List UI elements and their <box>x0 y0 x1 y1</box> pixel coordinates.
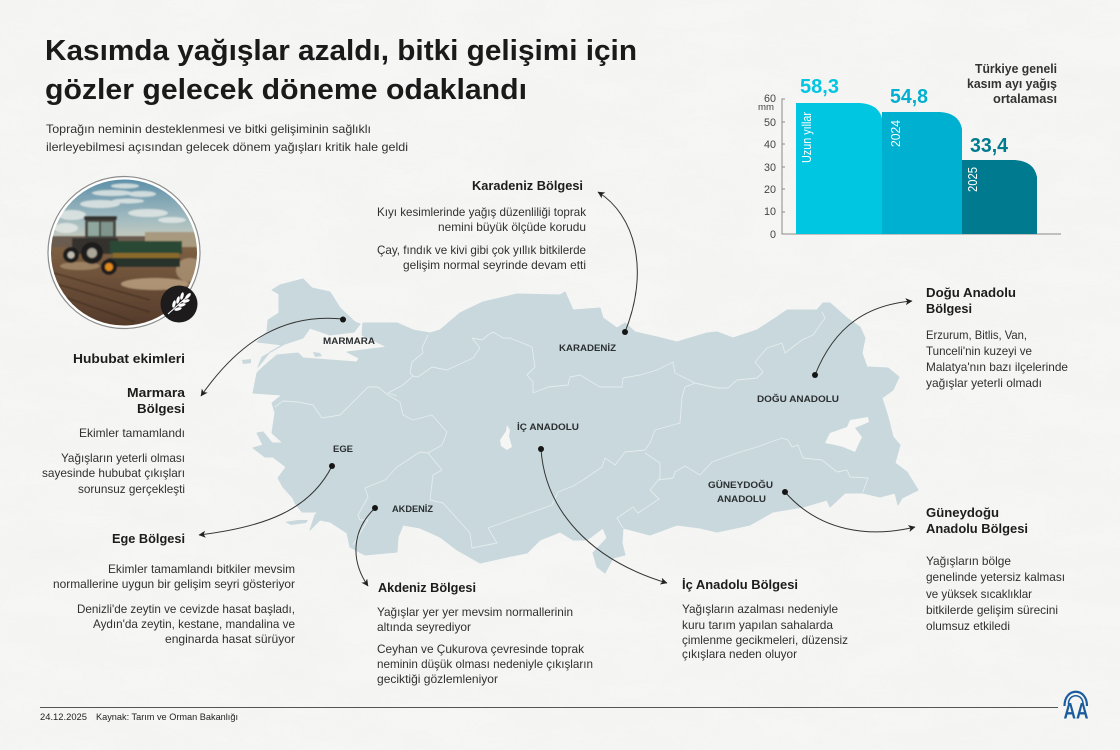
text block: Güneydoğu Anadolu Bölgesi: Anadolu Bölgesi <box>926 521 1028 536</box>
axis labels: 10 <box>764 206 776 218</box>
footer <box>40 708 1058 723</box>
bar: 2025: 2025 <box>965 167 980 192</box>
text block: Doğu Anadolu Bölgesi: Tunceli'nin kuzeyi ve <box>926 344 1032 358</box>
bar: 2025 <box>962 134 1037 234</box>
text block: Ege Bölgesi: Ege Bölgesi <box>112 531 185 546</box>
text block: Ege Bölgesi: Aydın'da zeytin, kestane, mandalina ve <box>93 617 295 631</box>
text block: Doğu Anadolu Bölgesi: Erzurum, Bitlis, Van, <box>926 328 1027 342</box>
text block: Doğu Anadolu Bölgesi <box>926 285 1068 390</box>
map region labels <box>323 336 839 515</box>
map region labels: GÜNEYDOĞU <box>708 479 773 491</box>
region borders <box>275 312 868 548</box>
map region labels: EGE <box>333 444 353 455</box>
axis labels: 0 <box>770 229 776 241</box>
photo: tractor sowing grain <box>48 176 204 329</box>
arrow: Karadeniz <box>598 192 637 335</box>
text block: Ege Bölgesi: normallerine uygun bir gelişim seyri gösteriyor <box>53 577 295 591</box>
axis labels: 30 <box>764 162 776 174</box>
bar: 2024: 2024 <box>888 120 903 147</box>
chart title: Türkiye geneli <box>975 62 1057 76</box>
lakes <box>500 425 512 450</box>
text block: Güneydoğu Anadolu Bölgesi: Güneydoğu <box>926 505 999 520</box>
arrow: Doğu Anadolu <box>812 301 912 378</box>
arrow: Ege <box>199 463 335 535</box>
text block: Akdeniz Bölgesi: geciktiği gözlemleniyor <box>377 672 498 686</box>
axes <box>782 99 1061 234</box>
text block: Marmara Bölgesi: sorunsuz gerçekleşti <box>78 482 185 496</box>
text block: Marmara Bölgesi: Yağışların yeterli olması <box>61 451 185 465</box>
title <box>45 35 637 106</box>
text block: Doğu Anadolu Bölgesi: yağışlar yeterli olmadı <box>926 376 1042 390</box>
axis labels: mm <box>758 102 774 113</box>
text block: Akdeniz Bölgesi <box>377 580 593 686</box>
arrow: Güneydoğu Anadolu <box>782 489 915 532</box>
text block: Akdeniz Bölgesi: Akdeniz Bölgesi <box>378 580 476 595</box>
axis labels: 50 <box>764 117 776 129</box>
arrow: Akdeniz <box>356 505 378 586</box>
text block: İç Anadolu Bölgesi: Yağışların azalması nedeniyle <box>682 602 838 616</box>
map region labels: MARMARA <box>323 336 375 347</box>
logo: AA: AA <box>1064 698 1089 724</box>
text block: Ege Bölgesi: Denizli'de zeytin ve cevizde hasat başladı, <box>77 602 295 616</box>
title: gözler gelecek döneme odaklandı <box>45 74 527 106</box>
chart title: ortalaması <box>993 92 1057 106</box>
text block: Güneydoğu Anadolu Bölgesi <box>926 505 1065 633</box>
islands <box>242 359 251 364</box>
title: Kasımda yağışlar azaldı, bitki gelişimi için <box>45 35 637 67</box>
arrow: İç Anadolu <box>538 446 667 583</box>
tractor <box>84 216 117 220</box>
text block: İç Anadolu Bölgesi: kuru tarım yapılan sahalarda <box>682 618 833 632</box>
bar: Uzun yıllar: 58,3 <box>800 75 839 98</box>
text block: Karadeniz Bölgesi: Karadeniz Bölgesi <box>472 178 583 193</box>
chart title <box>967 62 1057 106</box>
text block: Akdeniz Bölgesi: altında seyrediyor <box>377 620 471 634</box>
text block: İç Anadolu Bölgesi: çimlenme gecikmeleri, düzensiz <box>682 633 848 647</box>
subtitle: Toprağın neminin desteklenmesi ve bitki gelişiminin sağlıklı <box>46 122 371 136</box>
footer: 24.12.2025 <box>40 712 87 723</box>
text block: Karadeniz Bölgesi <box>377 178 587 272</box>
text block: Ege Bölgesi <box>53 531 295 646</box>
text block: İç Anadolu Bölgesi <box>682 577 848 661</box>
text block: Ege Bölgesi: Ekimler tamamlandı bitkiler mevsim <box>108 562 295 576</box>
Thrace <box>257 279 360 367</box>
text block: Marmara Bölgesi: Ekimler tamamlandı <box>79 426 185 440</box>
text block: Güneydoğu Anadolu Bölgesi: Yağışların bölge <box>926 554 1011 568</box>
text block: Doğu Anadolu Bölgesi: Bölgesi <box>926 301 972 316</box>
subtitle: ilerleyebilmesi açısından gelecek dönem yağışları kritik hale geldi <box>46 140 408 154</box>
bar: 2024: 54,8 <box>890 85 928 108</box>
text block: Marmara Bölgesi: sayesinde hububat çıkışları <box>42 466 185 480</box>
text block: Akdeniz Bölgesi: Ceyhan ve Çukurova çevresinde toprak <box>377 642 585 656</box>
logo: AA <box>1064 692 1089 724</box>
text block: Güneydoğu Anadolu Bölgesi: genelinde yetersiz kalması <box>926 570 1065 584</box>
footer: Kaynak: Tarım ve Orman Bakanlığı <box>96 712 238 723</box>
text block: İç Anadolu Bölgesi: çıkışlara neden oluyor <box>682 647 797 661</box>
bar: Uzun yıllar: Uzun yıllar <box>799 111 814 163</box>
bar: Uzun yıllar <box>796 75 882 234</box>
text block: Doğu Anadolu Bölgesi: Doğu Anadolu <box>926 285 1016 300</box>
axis labels: 20 <box>764 184 776 196</box>
text block: Doğu Anadolu Bölgesi: Malatya'nın bazı ilçelerinde <box>926 360 1068 374</box>
axis labels: 60 <box>764 93 776 105</box>
heading: Hububat ekimleri: Hububat ekimleri <box>73 351 185 366</box>
map region labels: AKDENİZ <box>392 504 433 515</box>
chart title: kasım ayı yağış <box>967 77 1057 91</box>
text block: Marmara Bölgesi <box>42 385 186 496</box>
text block: Ege Bölgesi: enginarda hasat sürüyor <box>165 632 295 646</box>
seeder <box>110 241 182 254</box>
text block: Akdeniz Bölgesi: Yağışlar yer yer mevsim normallerinin <box>377 605 573 619</box>
text block: Akdeniz Bölgesi: neminin düşük olması nedeniyle çıkışların <box>377 657 593 671</box>
bar chart: Türkiye geneli kasım ayı yağış ortalaması <box>758 62 1061 241</box>
Anatolia landmass <box>253 292 918 573</box>
text block: Karadeniz Bölgesi: Çay, fındık ve kivi gibi çok yıllık bitkilerde <box>377 243 586 257</box>
text block: Karadeniz Bölgesi: Kıyı kesimlerinde yağış düzenliliği toprak <box>377 205 587 219</box>
text block: Karadeniz Bölgesi: nemini büyük ölçüde korudu <box>438 220 586 234</box>
text block: İç Anadolu Bölgesi: İç Anadolu Bölgesi <box>682 577 798 592</box>
text block: Karadeniz Bölgesi: gelişim normal seyrinde devam etti <box>403 258 586 272</box>
map region labels: ANADOLU <box>717 494 766 505</box>
bar: 2024 <box>882 85 962 234</box>
map region labels: İÇ ANADOLU <box>517 422 579 433</box>
icon: wheat badge <box>160 286 198 322</box>
subtitle <box>46 122 408 154</box>
axis labels <box>758 93 776 241</box>
text block: Marmara Bölgesi: Bölgesi <box>137 401 185 416</box>
map region labels: DOĞU ANADOLU <box>757 393 839 405</box>
text block: Marmara Bölgesi: Marmara <box>127 385 186 400</box>
text block: Güneydoğu Anadolu Bölgesi: olumsuz etkiledi <box>926 619 1010 633</box>
map region labels: KARADENİZ <box>559 343 616 354</box>
text block: Güneydoğu Anadolu Bölgesi: ve yüksek sıcaklıklar <box>926 587 1032 601</box>
text block: Güneydoğu Anadolu Bölgesi: bitkilerde gelişim sürecini <box>926 603 1058 617</box>
axis labels: 40 <box>764 139 776 151</box>
arrow: Marmara <box>201 316 346 396</box>
bar: 2025: 33,4 <box>970 134 1009 157</box>
map of Turkey <box>242 279 918 573</box>
